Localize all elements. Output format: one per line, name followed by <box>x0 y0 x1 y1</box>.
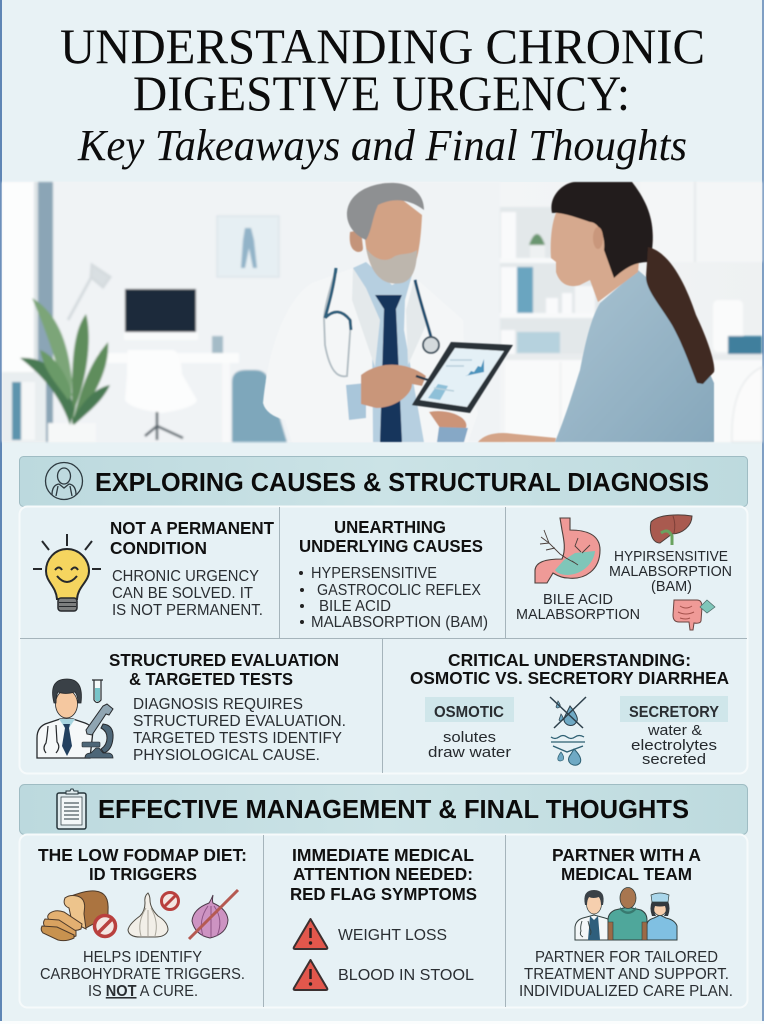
card: red flag symptoms <box>290 845 477 990</box>
label: bile acid malabsorption: MALABSORPTION <box>516 606 640 623</box>
card: digestive organs <box>516 515 732 630</box>
heading: IMMEDIATE MEDICAL <box>292 845 474 865</box>
text block: PHYSIOLOGICAL CAUSE. <box>133 747 320 764</box>
label: osmotic <box>425 697 514 761</box>
text block: HELPS IDENTIFY <box>83 949 202 966</box>
text block <box>519 949 733 1000</box>
icon: crossed out drops <box>550 697 586 728</box>
panel: causes and diagnosis <box>20 506 748 774</box>
card: underlying causes <box>299 517 488 631</box>
label: secretory: electrolytes <box>631 737 717 754</box>
title: DIGESTIVE URGENCY: <box>133 65 630 121</box>
heading: ATTENTION NEEDED: <box>293 864 473 884</box>
text block <box>40 949 245 1000</box>
symptom: weight loss: WEIGHT LOSS <box>338 927 447 944</box>
panel: management <box>20 834 748 1008</box>
heading: ID TRIGGERS <box>89 864 197 884</box>
text block <box>112 568 263 619</box>
icon: scientist with microscope <box>37 679 113 758</box>
label: secretory: water & <box>647 722 702 739</box>
text block: CARBOHYDRATE TRIGGERS. <box>40 966 245 983</box>
label: osmotic: solutes <box>443 729 496 746</box>
icon: care team <box>575 888 677 940</box>
heading: NOT A PERMANENT <box>110 518 274 538</box>
heading: STRUCTURED EVALUATION <box>109 650 339 670</box>
bullet list: GASTROCOLIC REFLEX <box>317 582 482 599</box>
doctor figure <box>263 268 478 442</box>
label: hypersensitive malabsorption <box>609 548 732 595</box>
heading <box>410 650 729 688</box>
icon: warning triangle <box>294 919 327 949</box>
heading: UNDERLYING CAUSES <box>299 536 483 556</box>
text block: CHRONIC URGENCY <box>112 568 259 585</box>
heading <box>109 650 339 689</box>
label: secretory: SECRETORY <box>629 704 720 721</box>
text block: TREATMENT AND SUPPORT. <box>524 966 729 983</box>
heading <box>552 845 701 884</box>
icon: intestine <box>673 600 715 630</box>
heading: THE LOW FODMAP DIET: <box>38 845 247 865</box>
heading: CONDITION <box>110 538 207 558</box>
icon: clipboard <box>57 789 86 829</box>
label: bile acid malabsorption <box>516 591 640 623</box>
label: hypersensitive malabsorption: (BAM) <box>651 578 692 595</box>
bullet list: BILE ACID <box>319 598 391 615</box>
section header: effective management <box>20 784 748 834</box>
label: osmotic: OSMOTIC <box>434 704 504 721</box>
card: osmotic vs secretory <box>410 650 729 768</box>
label: hypersensitive malabsorption: HYPIRSENSITIVE <box>614 548 728 565</box>
text block: IS NOT A CURE. <box>88 983 198 1000</box>
icon: warning triangle <box>294 960 327 990</box>
text block: INDIVIDUALIZED CARE PLAN. <box>519 983 733 1000</box>
card: medical team <box>519 845 733 1000</box>
icon: stomach <box>535 518 600 583</box>
text block: IS NOT PERMANENT. <box>112 602 263 619</box>
title: UNDERSTANDING CHRONIC <box>60 18 705 74</box>
text block: CAN BE SOLVED. IT <box>112 585 254 602</box>
heading: OSMOTIC VS. SECRETORY DIARRHEA <box>410 668 729 688</box>
heading: UNEARTHING <box>334 517 446 537</box>
icon: bread with no sign <box>41 891 116 941</box>
heading: RED FLAG SYMPTOMS <box>290 884 477 904</box>
icon: water drops under line <box>551 736 585 765</box>
label: secretory <box>620 696 728 768</box>
label: hypersensitive malabsorption: MALABSORPTION <box>609 563 732 580</box>
title: Key Takeaways and Final Thoughts <box>77 121 687 170</box>
section header: exploring causes <box>20 456 748 506</box>
heading <box>290 845 477 904</box>
photo: doctor showing tablet to patient <box>2 182 762 442</box>
card: not a permanent condition <box>33 518 274 619</box>
heading <box>299 517 483 556</box>
heading: EXPLORING CAUSES & STRUCTURAL DIAGNOSIS <box>95 467 709 497</box>
title <box>60 18 705 170</box>
text block: STRUCTURED EVALUATION. <box>133 713 346 730</box>
label: bile acid malabsorption: BILE ACID <box>543 591 613 608</box>
heading: PARTNER WITH A <box>552 845 701 865</box>
symptom: blood in stool: BLOOD IN STOOL <box>338 967 474 984</box>
text block: TARGETED TESTS IDENTIFY <box>133 730 342 747</box>
bullet list: MALABSORPTION (BAM) <box>311 614 488 631</box>
text block: PARTNER FOR TAILORED <box>535 949 718 966</box>
icon: garlic with no sign <box>128 892 178 937</box>
icon: doctor in circle <box>46 462 82 500</box>
text block <box>133 696 346 764</box>
bullet list: HYPERSENSITIVE <box>311 565 437 582</box>
patient figure <box>478 182 714 442</box>
icon: smiling light bulb <box>33 534 101 611</box>
text block: DIAGNOSIS REQUIRES <box>133 696 303 713</box>
card: low fodmap diet <box>38 845 247 1000</box>
icon: liver <box>650 515 692 545</box>
heading <box>110 518 274 558</box>
heading: MEDICAL TEAM <box>561 864 692 884</box>
label: secretory: secreted <box>642 751 706 768</box>
card: structured evaluation <box>37 650 346 764</box>
heading <box>38 845 247 884</box>
tablet <box>412 342 513 413</box>
heading: EFFECTIVE MANAGEMENT & FINAL THOUGHTS <box>98 794 689 824</box>
label: osmotic: draw water <box>428 744 511 761</box>
heading: & TARGETED TESTS <box>129 669 293 689</box>
bullet list <box>299 565 488 631</box>
heading: CRITICAL UNDERSTANDING: <box>448 650 691 670</box>
icon: onion crossed out <box>189 890 238 939</box>
